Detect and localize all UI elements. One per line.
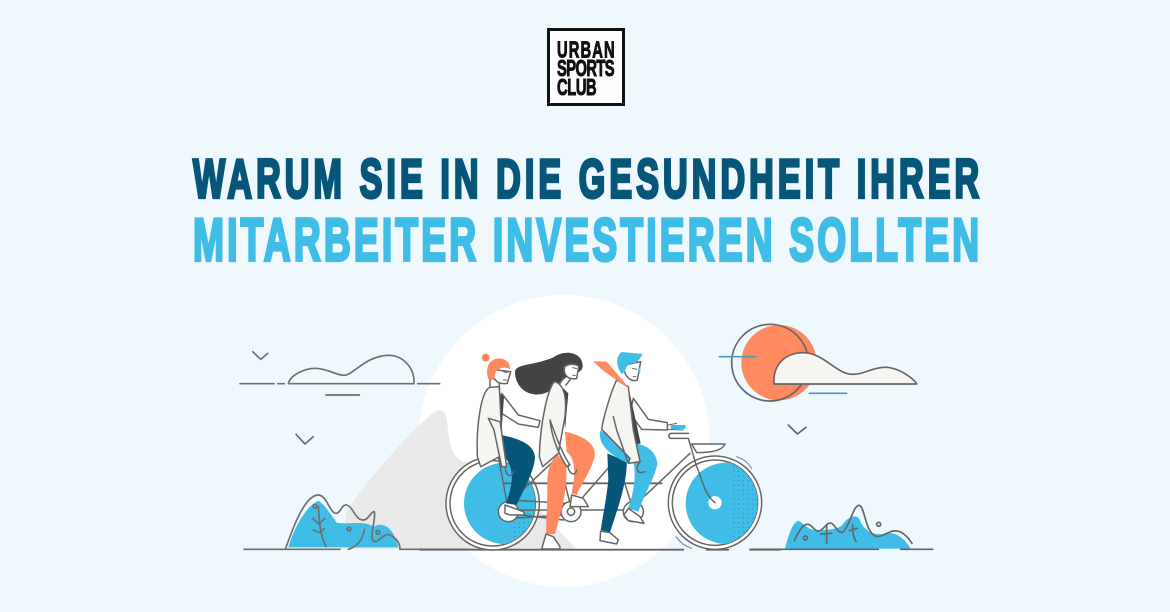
front wheel [668,456,767,549]
rider: man with blue hair and orange scarf [593,352,686,544]
title [193,148,979,274]
logo: Urban Sports Club [548,30,624,104]
left scene: cloud, birds and hill [240,352,470,549]
rider: woman with long dark hair [515,353,595,549]
ground line [420,547,780,552]
white background circle [418,295,710,587]
title: WARUM SIE IN DIE GESUNDHEIT IHRER [193,148,979,210]
icon: bird top left [253,352,268,359]
grey mountain [340,410,576,549]
rear wheel [446,457,545,550]
icon: blue hill right [750,505,933,549]
icon: outlined cloud with horizon lines [240,355,440,395]
logo: Urban Sports Club: SPORTS [557,57,615,82]
rider: woman with orange hair [477,354,540,515]
icon: cream cloud [774,353,917,384]
bicycle frame [498,433,725,522]
illustration: three people on a tandem bicycle [420,352,780,550]
icon: bird lower left [296,434,313,444]
title: MITARBEITER INVESTIEREN SOLLTEN [193,206,979,274]
icon: blue hill with plants [244,495,470,549]
right scene: sun, cloud, bird and hill [719,324,933,549]
icon: orange sun [719,324,847,401]
logo: Urban Sports Club: CLUB [557,76,597,101]
icon: bird [788,425,806,434]
logo: Urban Sports Club: URBAN [557,38,615,63]
